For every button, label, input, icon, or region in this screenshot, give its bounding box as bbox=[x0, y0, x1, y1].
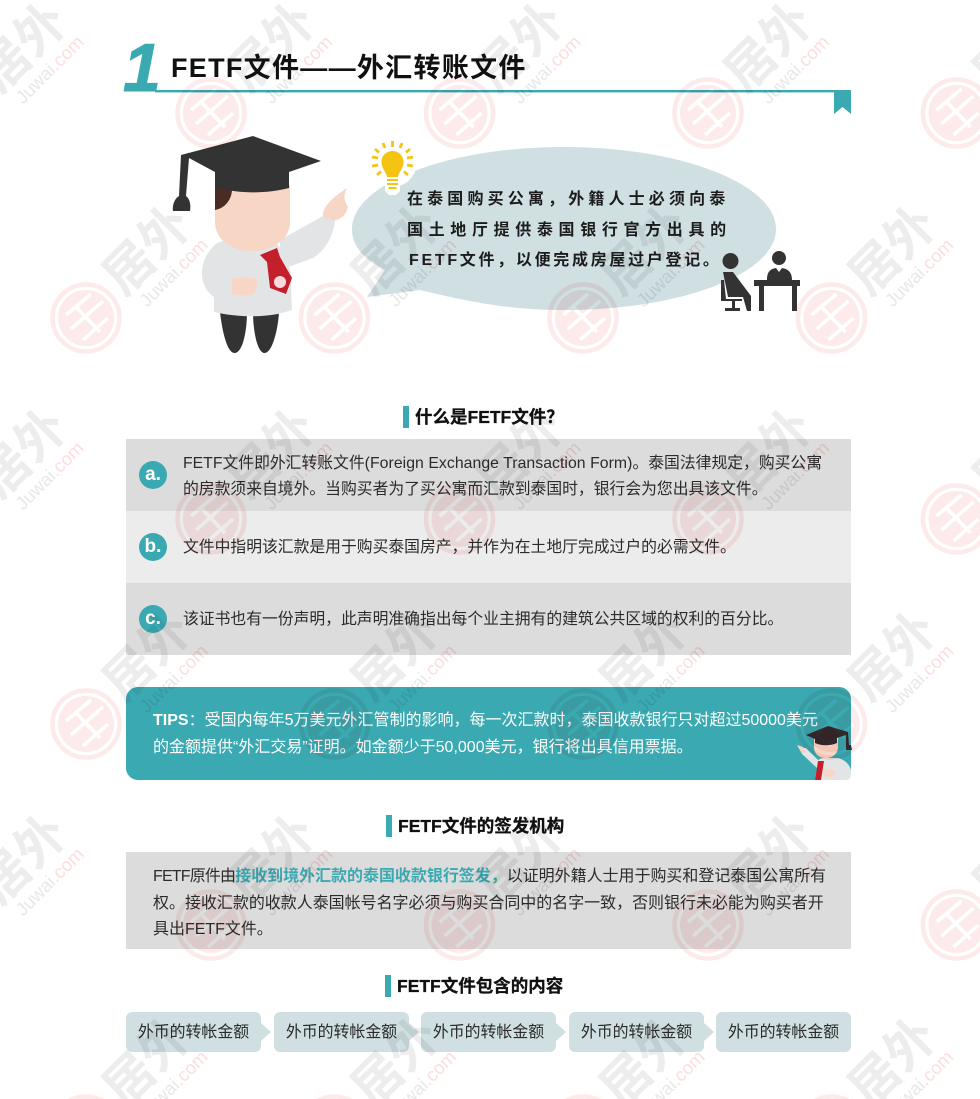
panel: issuer text bbox=[126, 852, 851, 949]
panel: definitions bbox=[126, 439, 851, 655]
legs bbox=[220, 312, 279, 353]
speech bubble bbox=[352, 147, 776, 310]
badge b: b. bbox=[145, 536, 161, 557]
heading: issuing institution: FETF文件的签发机构 bbox=[398, 816, 564, 836]
chevron 3: 外币的转帐金额 bbox=[433, 1024, 544, 1041]
tie emblem bbox=[274, 276, 286, 288]
issuer text: FETF原件由接收到境外汇款的泰国收款银行签发，以证明外籍人士用于购买和登记泰国公寓所有 bbox=[153, 868, 826, 885]
chevron 5 bbox=[716, 1012, 851, 1052]
hair bbox=[215, 186, 232, 210]
heading: what is FETF: 什么是FETF文件？ bbox=[415, 407, 564, 427]
tips text bbox=[153, 711, 818, 756]
graduation cap bbox=[173, 136, 321, 211]
chevron 2 bbox=[274, 1012, 409, 1052]
badge c bbox=[139, 605, 167, 633]
issuer text bbox=[153, 867, 826, 938]
badge b bbox=[139, 533, 167, 561]
bubble text bbox=[407, 190, 732, 269]
bubble line 2: 国土地厅提供泰国银行官方出具的 bbox=[407, 222, 732, 239]
row c text: 该证书也有一份声明，此声明准确指出每个业主拥有的建筑公共区域的权利的百分比。 bbox=[183, 611, 783, 628]
bubble line 3: FETF文件，以便完成房屋过户登记。 bbox=[409, 252, 722, 269]
chevron 5: 外币的转帐金额 bbox=[728, 1024, 839, 1041]
raised arm bbox=[280, 216, 335, 270]
title underline and ribbon bbox=[155, 90, 851, 114]
row a text: FETF文件即外汇转账文件(Foreign Exchange Transaction Form)。泰国法律规定，购买公寓 bbox=[183, 455, 822, 472]
icon: light bulb bbox=[372, 141, 416, 195]
icon: applicant and officer at desk bbox=[721, 251, 800, 311]
badge c: c. bbox=[145, 608, 161, 629]
title: FETF文件——外汇转账文件 bbox=[171, 53, 527, 83]
row b text: 文件中指明该汇款是用于购买泰国房产，并作为在土地厅完成过户的必需文件。 bbox=[183, 539, 736, 556]
chevron 4 bbox=[569, 1012, 704, 1052]
badge a bbox=[139, 461, 167, 489]
badge a: a. bbox=[145, 464, 161, 485]
panel: tips bbox=[126, 687, 851, 780]
row a background bbox=[126, 439, 851, 511]
chevron 2: 外币的转帐金额 bbox=[286, 1024, 397, 1041]
row c background bbox=[126, 583, 851, 655]
chevron 3 bbox=[421, 1012, 556, 1052]
heading: contents: FETF文件包含的内容 bbox=[397, 976, 563, 996]
row b background bbox=[126, 511, 851, 583]
number 1: 1 bbox=[123, 30, 161, 106]
chevron 1: 外币的转帐金额 bbox=[138, 1024, 249, 1041]
character: graduate pointing bbox=[172, 136, 348, 353]
issuer text: 具出FETF文件。 bbox=[153, 921, 273, 938]
tips text: TIPS：受国内每年5万美元外汇管制的影响，每一次汇款时，泰国收款银行只对超过50000美元 bbox=[153, 712, 818, 729]
row a text bbox=[183, 454, 822, 498]
head bbox=[215, 185, 290, 251]
body bbox=[202, 238, 292, 316]
chevron 4: 外币的转帐金额 bbox=[581, 1024, 692, 1041]
flow: contents chevrons bbox=[126, 1012, 851, 1052]
issuer text: 权。接收汇款的收款人泰国帐号名字必须与购买合同中的名字一致，否则银行未必能为购买者开 bbox=[153, 894, 824, 912]
row a text: 的房款须来自境外。当购买者为了买公寓而汇款到泰国时，银行会为您出具该文件。 bbox=[183, 481, 768, 498]
chevron 1 bbox=[126, 1012, 261, 1052]
tie bbox=[260, 248, 292, 294]
bubble line 1: 在泰国购买公寓，外籍人士必须向泰 bbox=[407, 191, 729, 208]
tips text: 的金额提供“外汇交易”证明。如金额少于50,000美元，银行将出具信用票据。 bbox=[153, 739, 693, 756]
hand bbox=[232, 278, 257, 295]
pointing hand bbox=[323, 188, 348, 220]
icon: small graduate bbox=[797, 726, 852, 780]
